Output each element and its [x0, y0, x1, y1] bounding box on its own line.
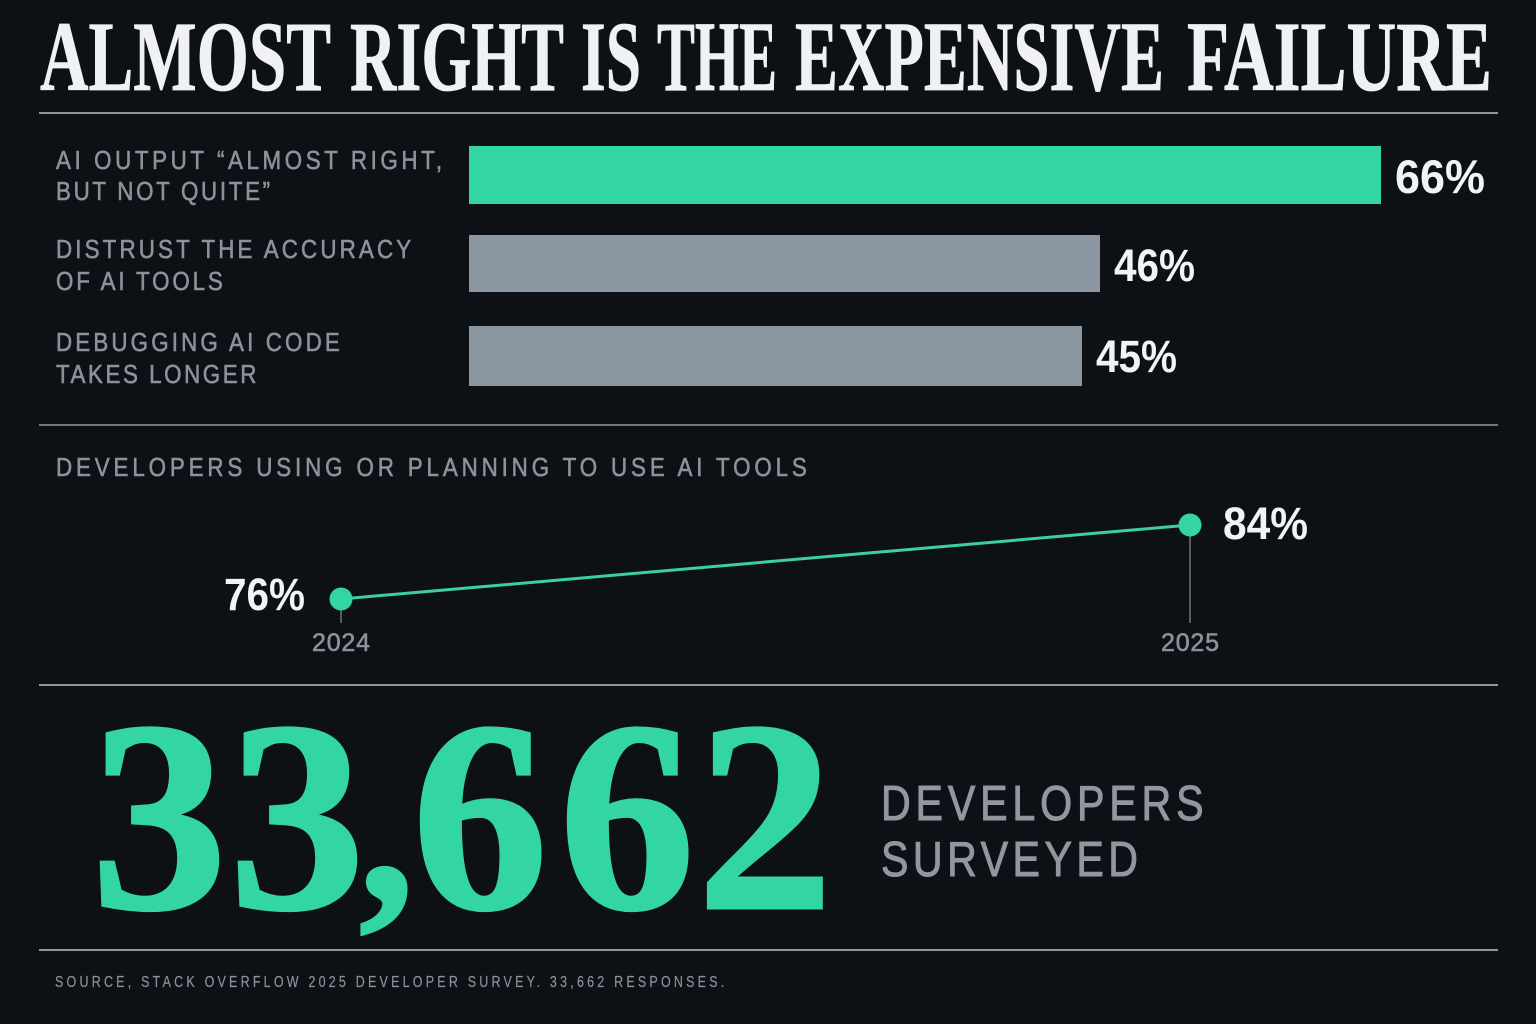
bar row: distrust 46%: 46%	[1114, 240, 1195, 291]
heading: adoption: DEVELOPERS USING OR PLANNING TO USE AI TOOLS	[56, 453, 807, 482]
title: EXPENSIVE	[795, 1, 1164, 112]
bar row: distrust 46%: DISTRUST THE ACCURACY	[56, 235, 411, 264]
bar row: distrust 46%: OF AI TOOLS	[56, 267, 223, 296]
bar row: almost right 66%: BUT NOT QUITE”	[56, 177, 270, 206]
title: RIGHT	[350, 1, 564, 112]
line chart: 2024	[312, 629, 370, 657]
big number	[91, 666, 833, 967]
title: IS	[581, 1, 641, 112]
panel: bar chart	[56, 146, 1485, 389]
big number caption: SURVEYED	[881, 832, 1138, 887]
line chart: 76%	[224, 569, 305, 620]
title	[40, 1, 1492, 112]
line chart: 84%	[1223, 498, 1308, 549]
title: THE	[657, 1, 777, 112]
big number caption: DEVELOPERS	[881, 776, 1204, 831]
line chart	[224, 498, 1308, 657]
bar row: debugging 45%: DEBUGGING AI CODE	[56, 328, 340, 357]
big number: 33	[91, 666, 365, 967]
bar row: distrust 46%	[56, 235, 1195, 296]
bar row: debugging 45%	[56, 326, 1177, 389]
bar row: almost right 66%: 66%	[1395, 150, 1485, 203]
bar row: debugging 45%: 45%	[1096, 331, 1177, 382]
source note: SOURCE, STACK OVERFLOW 2025 DEVELOPER SURVEY. 33,662 RESPONSES.	[55, 974, 724, 991]
title: ALMOST	[40, 1, 331, 112]
line chart: 2025	[1161, 629, 1219, 657]
bar row: almost right 66%: AI OUTPUT “ALMOST RIGHT,	[56, 146, 442, 175]
big number caption	[881, 776, 1204, 887]
big number: ,	[359, 703, 414, 949]
big number: 66	[412, 666, 695, 967]
big number: 2	[697, 666, 833, 967]
bar row: almost right 66%	[56, 146, 1485, 206]
bar row: debugging 45%: TAKES LONGER	[56, 360, 256, 389]
